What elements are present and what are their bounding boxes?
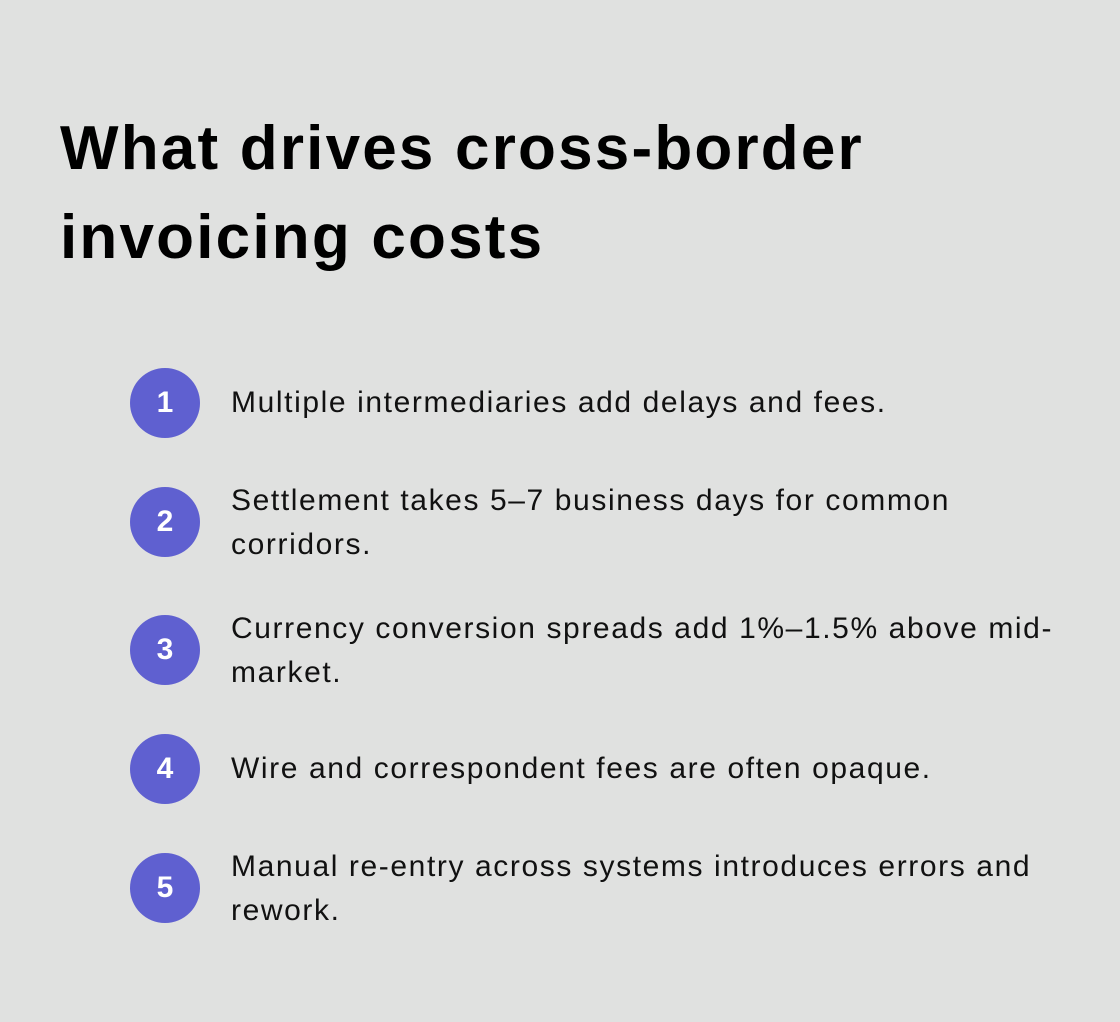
badge 3: 3 [157,633,173,666]
text 3: market. [231,656,342,689]
text 4: Wire and correspondent fees are often opaque. [231,752,932,785]
item 5 [130,850,1031,927]
text 2: corridors. [231,528,372,561]
title: What drives cross-border [60,114,864,183]
text 3 [231,612,1053,689]
text 5: rework. [231,894,341,927]
badge 4 [130,734,200,804]
badge 4: 4 [157,752,173,785]
text 2 [231,484,950,561]
item 2 [130,484,950,561]
title [60,114,864,272]
title: invoicing costs [60,203,544,272]
badge 5: 5 [157,871,173,904]
item 4 [130,734,932,804]
item 3 [130,612,1053,689]
badge 3 [130,615,200,685]
text 3: Currency conversion spreads add 1%–1.5% above mid- [231,612,1053,645]
badge 2: 2 [157,505,173,538]
text 5 [231,850,1031,927]
badge 1 [130,368,200,438]
text 1: Multiple intermediaries add delays and fees. [231,386,887,419]
text 2: Settlement takes 5–7 business days for common [231,484,950,517]
badge 2 [130,487,200,557]
badge 1: 1 [157,386,173,419]
item 1 [130,368,887,438]
badge 5 [130,853,200,923]
text 5: Manual re-entry across systems introduces errors and [231,850,1031,883]
